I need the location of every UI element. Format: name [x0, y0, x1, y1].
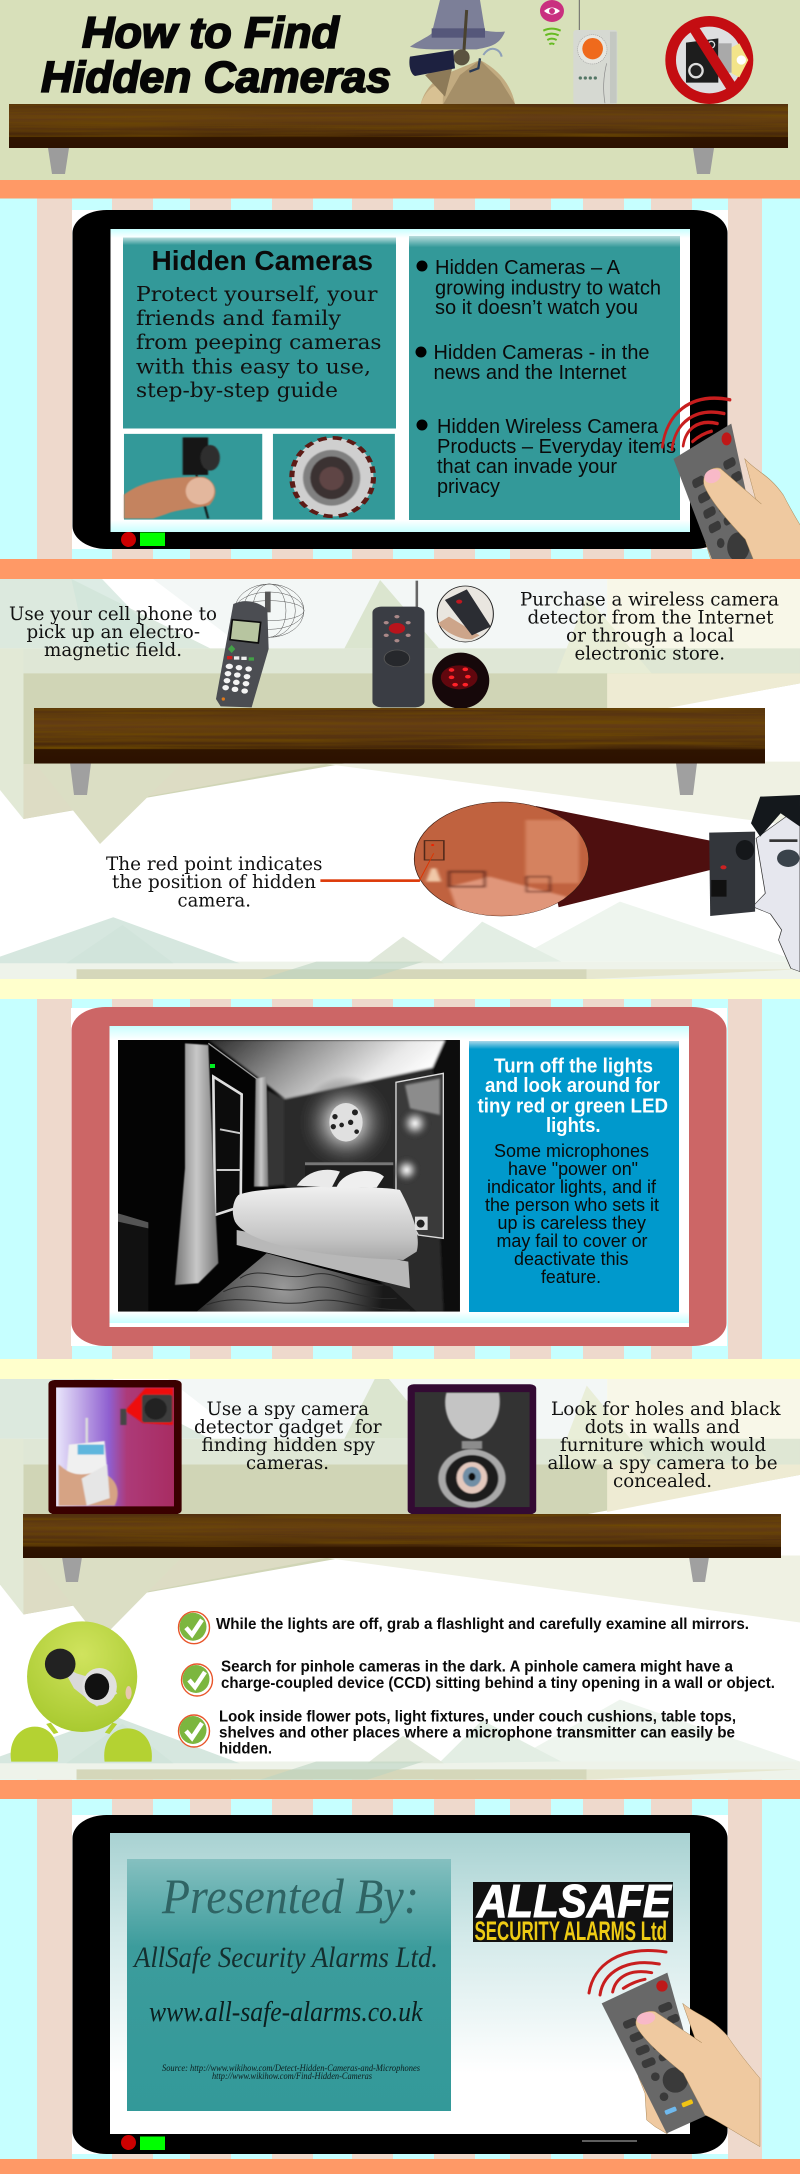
band: yellow — [0, 979, 800, 999]
photo: camera lens through torn paper — [273, 434, 395, 520]
text: protect yourself: Protect yourself, your — [136, 282, 378, 306]
text: microphones indicator lights: feature. — [541, 1267, 601, 1287]
text: purchase a detector — [520, 589, 779, 665]
photo: peephole with eye — [408, 1384, 536, 1514]
band: yellow second — [0, 1359, 800, 1379]
bullet 3 — [416, 416, 676, 498]
icon: spy with binoculars — [409, 0, 515, 104]
text: microphones indicator lights: the person who sets it — [485, 1195, 659, 1215]
photo: spy camera detector gadget — [48, 1380, 182, 1514]
heading: presented by: Presented By: — [161, 1868, 419, 1924]
bullet 2: news and the Internet — [434, 362, 627, 384]
text: use your cell phone: pick up an electro- — [26, 621, 200, 643]
text: purchase a detector: detector from the Internet — [528, 607, 774, 629]
screen: intro tablet — [110, 229, 690, 532]
text: protect yourself: from peeping cameras — [136, 330, 382, 354]
text: sources — [162, 2064, 420, 2082]
text: use a spy camera detector: cameras. — [246, 1452, 329, 1474]
text: use your cell phone: magnetic field. — [44, 639, 182, 661]
text: protect yourself: with this easy to use, — [136, 354, 371, 378]
bullet 2 — [416, 342, 650, 384]
text: use a spy camera detector: Use a spy camera — [207, 1398, 369, 1420]
bullet 1: Hidden Cameras – A — [435, 257, 621, 279]
icon: hand with remote, intro tablet — [662, 398, 800, 624]
band: orange footer — [0, 2159, 800, 2174]
text: sources: Source: http://www.wikihow.com/Detect-Hidden-Cameras-and-Microphones — [162, 2064, 420, 2074]
band: orange — [0, 180, 800, 198]
logo: AllSafe Security Alarms: SECURITY ALARMS Ltd — [474, 1916, 667, 1946]
text: look for holes: allow a spy camera to be — [548, 1452, 778, 1474]
logo: AllSafe Security Alarms — [473, 1875, 673, 1946]
bullet 2: Hidden Cameras - in the — [434, 342, 650, 364]
photo: dark bedroom at night — [118, 1040, 460, 1312]
icon: green webcam robot — [11, 1621, 152, 1762]
bullet 3: Hidden Wireless Camera — [437, 416, 659, 438]
bullet 1: so it doesn’t watch you — [435, 297, 638, 319]
status light: green bar, footer — [140, 2136, 165, 2150]
panel: hidden cameras intro — [123, 238, 396, 428]
heading: turn off the lights — [478, 1054, 668, 1137]
shelf: gadgets — [23, 1514, 781, 1582]
status light: green bar — [140, 532, 165, 546]
text: protect yourself: friends and family — [136, 306, 341, 330]
title: Hidden Cameras — [41, 53, 391, 102]
title: How to Find — [82, 8, 340, 58]
tip 3: hidden. — [219, 1741, 272, 1758]
shelf: detectors — [34, 708, 765, 795]
list: flashlight tips — [178, 1612, 775, 1758]
status light: red dot — [121, 532, 136, 547]
panel: presented by tablet frame — [72, 1815, 728, 2154]
text: use a spy camera detector: finding hidden spy — [202, 1434, 375, 1456]
text: red point indicates: camera. — [178, 890, 251, 912]
bullet 1 — [416, 257, 661, 319]
heading: turn off the lights: and look around for — [485, 1074, 660, 1097]
tip 2 — [182, 1659, 775, 1696]
tip 2: charge-coupled device (CCD) sitting behind a tiny opening in a wall or object. — [221, 1675, 775, 1692]
panel: detection section background — [0, 579, 800, 979]
text: microphones indicator lights: Some microphones — [494, 1141, 649, 1161]
text: red point indicates — [106, 853, 322, 912]
band: orange third — [0, 1780, 800, 1799]
text: company name: AllSafe Security Alarms Ltd. — [132, 1941, 438, 1974]
text: protect yourself — [136, 282, 382, 402]
text: protect yourself: step-by-step guide — [136, 378, 338, 402]
mark: thin line on bar — [582, 2140, 637, 2142]
bullet 3: privacy — [437, 476, 500, 498]
text: look for holes: furniture which would — [560, 1434, 766, 1456]
band: orange second — [0, 559, 800, 579]
text: microphones indicator lights: indicator lights, and if — [487, 1177, 657, 1197]
text: use your cell phone: Use your cell phone to — [9, 603, 217, 625]
text: look for holes: Look for holes and black — [551, 1398, 781, 1420]
shelf: header — [9, 104, 788, 174]
heading: turn off the lights: tiny red or green LED — [478, 1094, 668, 1118]
icon: eye badge with signal — [540, 0, 564, 44]
screen: lights off tablet — [110, 1026, 689, 1327]
logo: AllSafe Security Alarms: ALLSAFE — [476, 1875, 672, 1927]
tip 3: shelves and other places where a microphone transmitter can easily be — [219, 1725, 735, 1742]
text: microphones indicator lights — [485, 1141, 659, 1287]
status light: red dot, footer — [121, 2135, 136, 2150]
icon: RF camera detector with two insets — [372, 581, 493, 709]
panel: spy gadget section background — [0, 1367, 800, 1780]
icon: detector held to viewer's face — [709, 795, 800, 972]
text: microphones indicator lights: up is careless they — [498, 1213, 646, 1233]
screen: presented by tablet — [110, 1833, 690, 2134]
text: look for holes: dots in walls and — [585, 1416, 740, 1438]
text: red point indicates: the position of hidden — [112, 871, 316, 893]
text: microphones indicator lights: may fail to cover or — [496, 1231, 648, 1251]
icon: green LED in photo — [210, 1064, 215, 1068]
icon: cell phone with magnetic field — [216, 584, 304, 707]
photo: fingers holding pinhole camera — [124, 434, 262, 520]
text: red point indicates: The red point indicates — [106, 853, 322, 875]
tip 2: Search for pinhole cameras in the dark. A pinhole camera might have a — [221, 1659, 733, 1676]
bullet 3: Products – Everyday items — [437, 436, 676, 458]
text: purchase a detector: or through a local — [566, 625, 734, 647]
text: microphones indicator lights: deactivate this — [514, 1249, 628, 1269]
text: look for holes — [548, 1398, 781, 1492]
text: purchase a detector: Purchase a wireless camera — [520, 589, 779, 611]
tip 3: Look inside flower pots, light fixtures, under couch cushions, table tops, — [219, 1709, 736, 1726]
heading: turn off the lights: lights. — [546, 1114, 600, 1137]
panel: header background — [0, 0, 800, 180]
text: use a spy camera detector: detector gadget for — [194, 1416, 382, 1438]
text: sources: http://www.wikihow.com/Find-Hidden-Cameras — [212, 2072, 372, 2082]
icon: handheld bug detector — [573, 0, 617, 104]
text: look for holes: concealed. — [613, 1470, 712, 1492]
panel: lights off text — [469, 1041, 679, 1312]
text: microphones indicator lights: have "power on" — [508, 1159, 638, 1179]
panel: intro tablet frame — [72, 210, 728, 549]
tip 1 — [178, 1612, 749, 1644]
panel: lights off tablet frame — [71, 1007, 727, 1346]
title — [41, 8, 391, 102]
text: use a spy camera detector — [194, 1398, 382, 1474]
heading: turn off the lights: Turn off the lights — [494, 1054, 653, 1078]
icon: hand with remote, footer tablet — [589, 1951, 760, 2147]
text: purchase a detector: electronic store. — [574, 643, 725, 665]
bullet 1: growing industry to watch — [435, 278, 661, 300]
text: use your cell phone — [9, 603, 217, 661]
text: website: www.all-safe-alarms.co.uk — [149, 1997, 423, 2028]
panel: bullet list — [409, 236, 680, 520]
bullet 3: that can invade your — [437, 456, 617, 478]
heading: hidden cameras: Hidden Cameras — [152, 245, 373, 276]
tip 1: While the lights are off, grab a flashlight and carefully examine all mirrors. — [216, 1616, 749, 1633]
tip 3 — [178, 1709, 736, 1758]
icon: no cameras sign — [665, 16, 753, 104]
chart: detector beam revealing room — [320, 802, 710, 916]
panel: presented by — [127, 1859, 451, 2111]
